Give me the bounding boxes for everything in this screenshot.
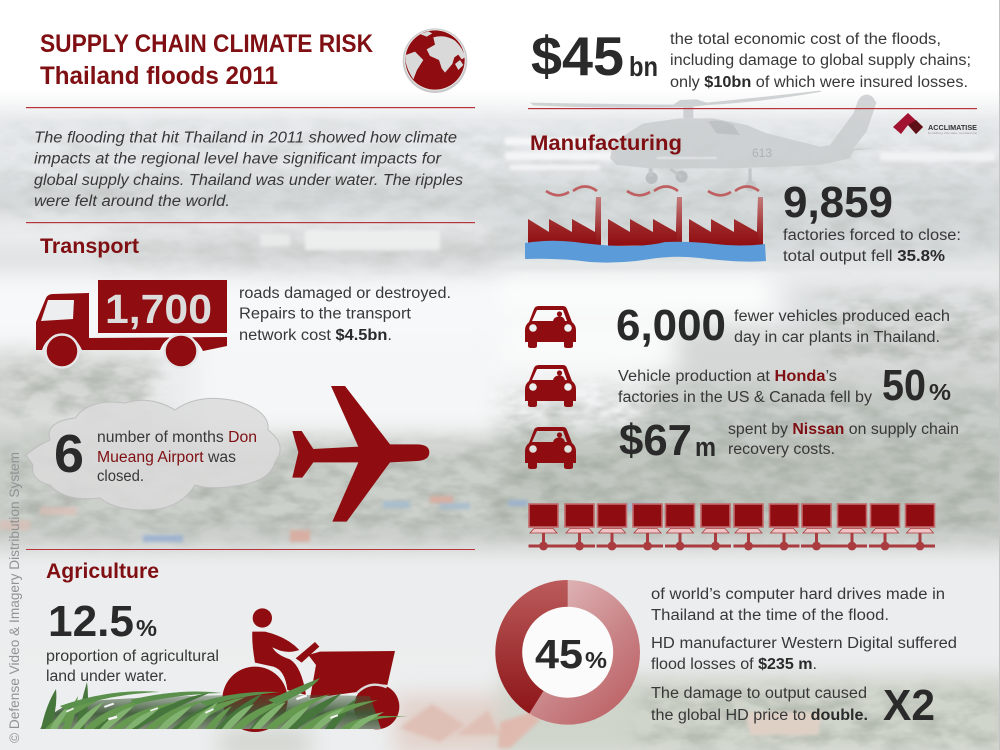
statistic: X2: X2 [883,681,935,730]
callout: airport cloud: Mueang Airport was [97,449,236,466]
economic cost text: including damage to global supply chains; [670,52,971,69]
icon: grass [40,678,408,729]
hard drives text: the global HD price to double. [651,707,868,724]
divider top left [26,107,475,108]
hard drives text: HD manufacturer Western Digital suffered [651,635,957,652]
transport text: Repairs to the transport [239,306,412,322]
factory one [528,186,601,245]
agriculture text: proportion of agricultural [46,648,219,665]
Honda text: Vehicle production at Honda’s [618,368,837,385]
hard drives text: flood losses of $235 m. [651,656,817,673]
transport text: network cost $4.5bn. [239,327,392,344]
intro text: global supply chains. Thailand was under water. The ripples [34,172,463,189]
divider agriculture [26,549,475,550]
factories text [783,227,961,265]
transport text [239,285,451,344]
icon: tractor [222,608,399,732]
statistic: 50%: % [929,379,951,405]
heading: Manufacturing: Manufacturing [530,131,682,155]
Nissan text [728,421,959,458]
agriculture text [46,648,219,685]
callout: airport cloud: 6 [54,424,84,484]
vehicles text: fewer vehicles produced each [734,308,950,325]
Honda text [618,368,872,406]
Nissan text: recovery costs. [728,441,835,458]
Honda text: factories in the US & Canada fell by [618,389,872,406]
icon: truck with 1,700 [36,280,227,368]
logo: Acclimatise: ACCLIMATISE [928,123,977,132]
factories text: factories forced to close: [783,227,961,244]
statistic: 12.5%: 12.5 [48,597,134,646]
heading: Transport: Transport [40,234,139,258]
title: Thailand floods 2011 [40,62,278,90]
divider transport [26,222,475,223]
callout: airport cloud: closed. [97,468,144,485]
icon: globe [403,28,467,93]
icon: row of twelve computers [528,504,935,550]
hard drives text: The damage to output caused [651,685,867,702]
statistic: $45bn: $45 [531,25,624,87]
transport text: roads damaged or destroyed. [239,285,451,302]
helicopter silhouette [530,91,877,191]
Nissan text: spent by Nissan on supply chain [728,421,959,438]
icon: plane [292,386,429,522]
hard drives text [651,586,957,724]
icon: flooded factories [525,186,766,263]
intro text [34,130,463,210]
statistic: 6,000: 6,000 [616,301,726,350]
icon: car three [525,427,576,469]
chart: 45% donut [495,580,640,725]
icon: car two [525,365,576,407]
icon: truck with 1,700: 1,700 [105,286,212,332]
chart: 45% donut: 45 [535,631,583,677]
hard drives text: Thailand at the time of the flood. [651,607,889,624]
vehicles text: day in car plants in Thailand. [734,329,940,346]
logo: Acclimatise: building climate resilience [928,131,977,135]
statistic: $67m: $67 [619,416,692,465]
statistic: $45bn: bn [629,51,658,82]
statistic: 50%: 50 [882,361,926,410]
hard drives text: of world’s computer hard drives made in [651,586,945,603]
chart: 45% donut: % [585,647,607,673]
photo credit: © Defense Video & Imagery Distribution System [7,452,22,743]
intro text: impacts at the regional level have significant impacts for [34,150,442,168]
icon: car one [525,306,576,348]
intro text: The flooding that hit Thailand in 2011 showed how climate [34,130,457,146]
statistic: 9,859: 9,859 [783,178,893,227]
title [40,30,373,90]
factory three [689,186,763,246]
flood water [525,241,766,263]
vehicles text [734,308,950,346]
callout: airport cloud: number of months Don [97,429,257,446]
economic cost text: only $10bn of which were insured losses. [670,74,968,91]
factory two [608,186,682,246]
helicopter number: 613 [752,146,772,160]
statistic: 12.5%: % [136,615,157,641]
economic cost text: the total economic cost of the floods, [670,31,941,48]
heading: Agriculture: Agriculture [46,559,159,583]
logo: Acclimatise [893,113,977,135]
divider top right [528,108,977,109]
factories text: total output fell 35.8% [783,248,945,265]
statistic: $67m: m [695,432,716,462]
agriculture text: land under water. [46,668,167,685]
title: SUPPLY CHAIN CLIMATE RISK [40,30,373,58]
callout: airport cloud [26,398,280,510]
intro text: were felt around the world. [34,193,230,210]
economic cost text [670,31,971,91]
